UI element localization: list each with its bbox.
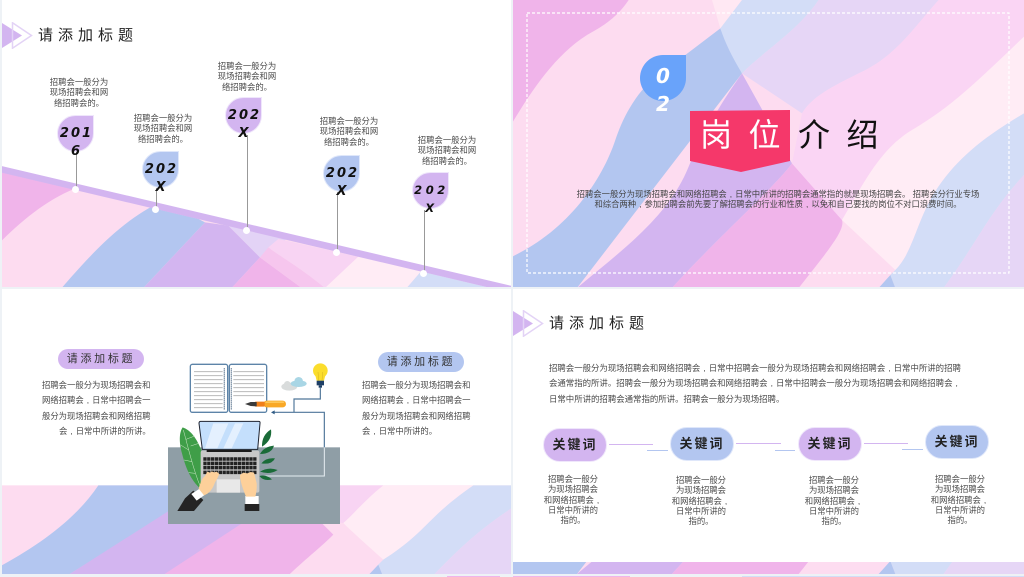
left text: 网络招聘会 日常中招聘会一 — [42, 395, 150, 405]
keyword text 4: 为现场招聘会 — [935, 484, 985, 494]
keyword text 1: , — [597, 495, 599, 505]
keyword text 3: 日常中所讲的 — [809, 506, 859, 516]
keyword text 2 — [672, 475, 727, 526]
icon: title arrows — [513, 310, 544, 337]
wires — [273, 387, 324, 447]
left text — [42, 380, 151, 436]
description: , — [639, 199, 641, 209]
left text: , — [87, 395, 89, 405]
text: milestone 4: 现场招聘会和网 — [320, 126, 378, 136]
text: milestone 5: 招聘会一般分为 — [418, 135, 476, 145]
keyword 1 — [543, 428, 607, 462]
pin: 202X purple last: 202 — [414, 183, 449, 197]
connector 1 — [76, 150, 77, 188]
keyword text 4: 和网络招聘会 — [931, 495, 981, 505]
desk — [168, 447, 340, 524]
connector 4 — [337, 192, 338, 250]
pin: 202X blue — [142, 151, 179, 188]
pin: 202X blue second: 202 — [326, 166, 359, 181]
text: milestone 1: 现场招聘会和网 — [50, 87, 108, 97]
text: milestone 2: 现场招聘会和网 — [134, 123, 192, 133]
pin: 202X blue second: X — [336, 184, 349, 198]
keyword text 3: , — [858, 496, 860, 506]
body text: 会通常指的所讲。招聘会一般分为现场招聘会和网络招聘会 日常中招聘会一般分为现场招聘会和网络招聘会 — [549, 378, 952, 388]
right text: 招聘会一般分为现场招聘会和 — [362, 380, 470, 390]
red banner — [690, 110, 790, 172]
pin: 202X blue: X — [155, 180, 168, 194]
keyword 1: 关键词 — [552, 437, 598, 452]
keyword text 1: 日常中所讲的 — [548, 505, 598, 515]
text: milestone 5: 现场招聘会和网 — [418, 145, 476, 155]
connector 2 — [156, 188, 157, 208]
connector 3 top — [864, 442, 908, 444]
left text: , — [70, 426, 73, 436]
dot 1 — [72, 186, 79, 193]
wave footer — [2, 485, 511, 574]
keyword text 3: 为现场招聘会 — [809, 485, 859, 495]
right text — [362, 380, 470, 436]
description: 和综合两种 参加招聘会前先要了解招聘会的行业和性质 以免和自己要找的岗位不对口浪费时间。 — [594, 199, 962, 209]
keyword text 1: 指的。 — [560, 515, 586, 525]
laptop — [199, 421, 260, 493]
section number: 0 — [656, 64, 670, 88]
light bulb — [313, 363, 328, 388]
wave footer strip — [513, 562, 1024, 574]
keyword text 1: 招聘会一般分 — [548, 474, 598, 484]
connector 3 bottom — [902, 449, 923, 450]
text: milestone 3: 招聘会一般分为 — [218, 61, 276, 71]
pin: 202X purple last: X — [425, 200, 438, 214]
keyword text 4: 日常中所讲的 — [935, 505, 985, 515]
description: , — [730, 189, 732, 199]
text: milestone 5 — [418, 135, 476, 166]
keyword 3 — [798, 427, 862, 461]
keyword text 2: 指的。 — [688, 516, 714, 526]
right text: 般分为现场招聘会和网络招聘 — [362, 411, 470, 421]
next slide peek: right blue — [742, 576, 1024, 577]
pin: 202X purple: 202 — [228, 108, 261, 123]
body text: , — [771, 378, 773, 388]
section number: 2 — [656, 92, 670, 116]
text: milestone 3: 络招聘会的。 — [222, 82, 272, 92]
text: milestone 2: 招聘会一般分为 — [134, 113, 192, 123]
body text — [549, 363, 961, 404]
body text: , — [956, 378, 958, 388]
clouds — [281, 377, 307, 391]
keyword text 2: 日常中所讲的 — [676, 506, 726, 516]
icon: title arrows — [2, 22, 32, 49]
heading: highlighted: 岗位 — [700, 117, 797, 153]
keyword text 3: 和网络招聘会 — [805, 496, 855, 506]
keyword text 2: 为现场招聘会 — [676, 485, 726, 495]
icon: number drop — [640, 55, 686, 101]
body text: 日常中所讲的招聘会通常指的所讲。招聘会一般分为现场招聘。 — [549, 394, 784, 404]
text: milestone 2: 络招聘会的。 — [138, 134, 188, 144]
text: milestone 3 — [218, 61, 276, 92]
connector 2 top — [736, 443, 781, 444]
left text: 招聘会一般分为现场招聘会和 — [42, 380, 150, 390]
keyword text 2: , — [725, 496, 727, 506]
description — [576, 189, 979, 209]
description: , — [806, 199, 808, 209]
dark leaves — [259, 429, 278, 480]
keyword 2 — [670, 427, 734, 461]
right hand and arm — [240, 472, 259, 511]
connector 1 top — [609, 444, 653, 445]
pin: 2016: 201 — [60, 126, 93, 141]
pin: 202X purple — [225, 97, 262, 134]
description: 招聘会一般分为现场招聘会和网络招聘会 日常中所讲的招聘会通常指的就是现场招聘会。 招聘会分行业专场 — [577, 189, 979, 199]
keyword text 1: 和网络招聘会 — [544, 495, 594, 505]
keyword text 4: 指的。 — [947, 515, 973, 525]
keyword 4: 关键词 — [934, 434, 980, 449]
keyword text 3: 招聘会一般分 — [809, 475, 859, 485]
text: milestone 1: 招聘会一般分为 — [50, 77, 108, 87]
notebook — [190, 364, 267, 412]
connector 2 bottom — [775, 450, 795, 451]
panel: section cover — [513, 0, 1024, 287]
heading: 请添加标题 — [549, 315, 649, 332]
pin: 202X blue second — [323, 155, 360, 192]
connector 3 — [247, 135, 248, 227]
left tag — [58, 349, 144, 369]
text: milestone 1 — [50, 77, 108, 108]
right text: 会 日常中所讲的。 — [362, 426, 437, 436]
keyword text 4 — [931, 474, 986, 525]
body text: 招聘会一般分为现场招聘会和网络招聘会 日常中招聘会一般分为现场招聘会和网络招聘会 日常中所讲的招聘 — [549, 363, 961, 373]
text: milestone 3: 现场招聘会和网 — [218, 71, 276, 81]
keyword text 3 — [805, 475, 860, 526]
pin: 202X purple: X — [238, 126, 251, 140]
green leaf — [180, 427, 201, 489]
dot 2 — [152, 206, 159, 213]
text: milestone 1: 络招聘会的。 — [54, 98, 104, 108]
heading: dark: 介绍 — [798, 117, 895, 153]
pin: 202X blue: 202 — [145, 162, 178, 177]
dot 4 — [333, 249, 340, 256]
left text: 般分为现场招聘会和网络招聘 — [42, 411, 150, 421]
connector 1 bottom — [647, 450, 668, 451]
keyword text 3: 指的。 — [821, 516, 847, 526]
text: milestone 4: 招聘会一般分为 — [320, 116, 378, 126]
pen — [245, 401, 286, 407]
pin: 202X purple last — [412, 172, 449, 209]
keyword text 2: 招聘会一般分 — [676, 475, 726, 485]
right tag — [378, 352, 464, 372]
section number — [656, 64, 670, 116]
dot 3 — [243, 227, 250, 234]
panel: illustration slide — [2, 289, 511, 574]
keyword text 4: 招聘会一般分 — [935, 474, 985, 484]
text: milestone 2 — [134, 113, 192, 144]
wave background — [513, 0, 1024, 287]
connector 5 — [424, 210, 425, 271]
text: milestone 5: 络招聘会的。 — [422, 156, 472, 166]
pin: 2016: 6 — [71, 144, 82, 158]
left text: 会 日常中所讲的所讲。 — [59, 426, 151, 436]
dashed frame — [526, 12, 1010, 274]
right text: , — [407, 395, 409, 405]
keyword text 2: 和网络招聘会 — [672, 496, 722, 506]
text: milestone 4 — [320, 116, 378, 147]
left tag: 请添加标题 — [67, 353, 135, 365]
keyword text 4: , — [984, 495, 986, 505]
keyword 4 — [925, 425, 989, 459]
keyword text 1 — [544, 474, 599, 525]
body text: , — [703, 363, 706, 373]
panel: timeline slide — [2, 0, 511, 287]
left hand and arm — [177, 471, 219, 511]
diagonal wave background — [2, 166, 511, 287]
keyword text 1: 为现场招聘会 — [548, 484, 598, 494]
dot 5 — [420, 270, 427, 277]
text: milestone 4: 络招聘会的。 — [324, 137, 374, 147]
right tag: 请添加标题 — [387, 356, 455, 368]
panel: keywords slide — [513, 289, 1024, 574]
heading: 请添加标题 — [38, 27, 138, 44]
body text: , — [888, 363, 891, 373]
next slide peek: left — [447, 576, 500, 577]
keyword 3: 关键词 — [807, 436, 852, 451]
right text: , — [373, 426, 376, 436]
keyword 2: 关键词 — [679, 436, 724, 451]
right text: 网络招聘会 日常中招聘会一 — [362, 395, 470, 405]
next slide peek: right pink — [513, 576, 630, 577]
pin: 2016 — [57, 115, 94, 152]
illustration: laptop at desk — [168, 363, 340, 524]
